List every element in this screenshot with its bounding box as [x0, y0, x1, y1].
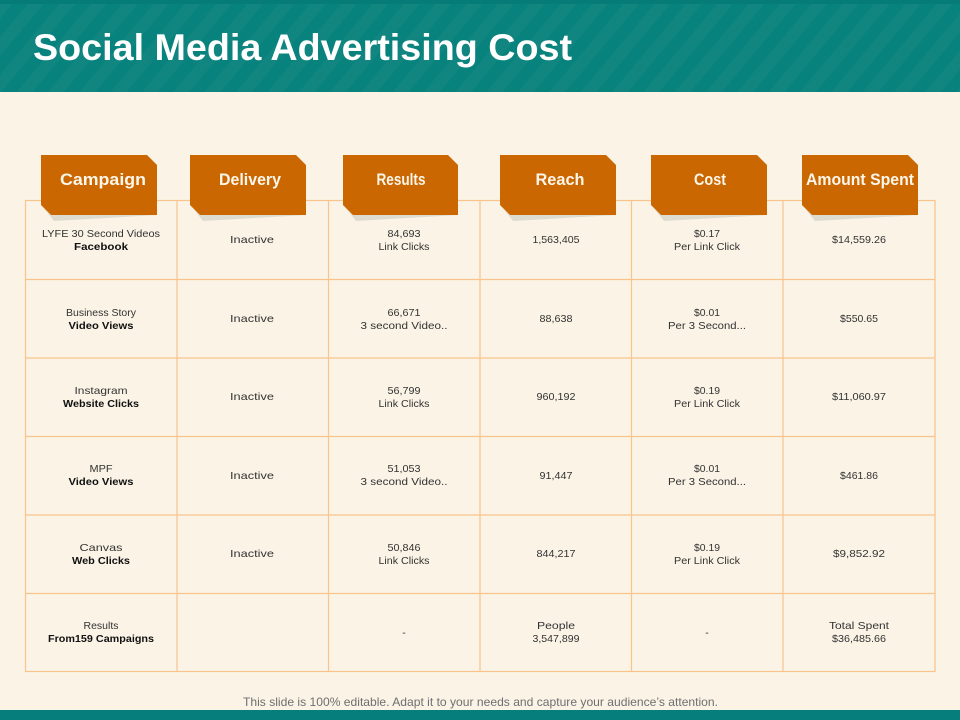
row 2: 3 second Video.. — [360, 320, 448, 332]
row 2: Inactive — [230, 313, 274, 325]
row 2: Business Story — [66, 307, 137, 319]
row 6: totals: - — [402, 627, 406, 639]
row 5: Canvas — [80, 542, 122, 554]
row 5: 844,217 — [536, 548, 576, 560]
row 2: Per 3 Second... — [668, 320, 746, 332]
header: Cost: Cost — [694, 170, 726, 189]
row 4: $0.01 — [694, 463, 720, 475]
header: Campaign — [41, 155, 157, 221]
row 2: $550.65 — [840, 313, 878, 325]
footer bar — [0, 710, 960, 720]
row 6: totals — [48, 620, 889, 645]
row 5: Web Clicks — [72, 555, 130, 567]
row 1: 84,693 — [388, 228, 421, 240]
row 5 — [72, 542, 885, 567]
header: Reach — [500, 155, 616, 221]
row 6: totals: Total Spent — [829, 620, 889, 632]
header: Delivery: Delivery — [219, 170, 281, 189]
row 4: Inactive — [230, 470, 274, 482]
row 4: 91,447 — [540, 470, 573, 482]
row 5: 50,846 — [388, 542, 421, 554]
row 1 — [42, 228, 886, 253]
row 3: Website Clicks — [63, 398, 139, 410]
row 6: totals: 3,547,899 — [532, 633, 580, 645]
footer note: This slide is 100% editable. Adapt it to your needs and capture your audience’s attention. — [243, 695, 718, 709]
header: Results — [343, 155, 458, 221]
row 3: 56,799 — [388, 385, 421, 397]
row 6: totals: People — [537, 620, 575, 632]
row 2: 88,638 — [540, 313, 573, 325]
row 2: Video Views — [68, 320, 134, 332]
row 1: 1,563,405 — [532, 234, 580, 246]
row 5: $9,852.92 — [833, 548, 885, 560]
row 3: 960,192 — [536, 391, 576, 403]
row 5: Inactive — [230, 548, 274, 560]
row 5: Per Link Click — [674, 555, 741, 567]
row 1: LYFE 30 Second Videos — [42, 228, 160, 240]
header: Results: Results — [376, 170, 426, 189]
table grid — [25, 200, 935, 672]
row 4: Per 3 Second... — [668, 476, 746, 488]
row 4: MPF — [90, 463, 112, 475]
header: Amount Spent — [802, 155, 918, 221]
header: Reach: Reach — [536, 170, 584, 189]
row 5: Link Clicks — [378, 555, 430, 567]
header banner — [0, 0, 960, 92]
row 1: Link Clicks — [378, 241, 430, 253]
row 4 — [68, 463, 878, 488]
row 6: totals: - — [705, 627, 709, 639]
row 4: 3 second Video.. — [360, 476, 448, 488]
row 4: Video Views — [68, 476, 134, 488]
row 3 — [63, 385, 886, 410]
header: Cost — [651, 155, 767, 221]
row 2: $0.01 — [694, 307, 720, 319]
row 4: $461.86 — [840, 470, 878, 482]
row 3: Link Clicks — [378, 398, 430, 410]
row 3: $11,060.97 — [832, 391, 886, 403]
row 2 — [66, 307, 878, 332]
header: Delivery — [190, 155, 306, 221]
row 6: totals: From159 Campaigns — [48, 633, 154, 645]
row 1: Per Link Click — [674, 241, 741, 253]
row 6: totals: Results — [84, 620, 118, 632]
row 1: $14,559.26 — [832, 234, 886, 246]
row 6: totals: $36,485.66 — [832, 633, 886, 645]
title: Social Media Advertising Cost — [33, 27, 572, 68]
row 3: $0.19 — [694, 385, 720, 397]
row 1: $0.17 — [694, 228, 720, 240]
row 3: Instagram — [74, 385, 128, 397]
header: Amount Spent: Amount Spent — [806, 170, 914, 189]
row 5: $0.19 — [694, 542, 720, 554]
header: Campaign: Campaign — [60, 170, 146, 189]
row 3: Per Link Click — [674, 398, 741, 410]
row 1: Inactive — [230, 234, 274, 246]
row 4: 51,053 — [388, 463, 421, 475]
row 1: Facebook — [74, 241, 128, 253]
row 2: 66,671 — [388, 307, 421, 319]
row 3: Inactive — [230, 391, 274, 403]
